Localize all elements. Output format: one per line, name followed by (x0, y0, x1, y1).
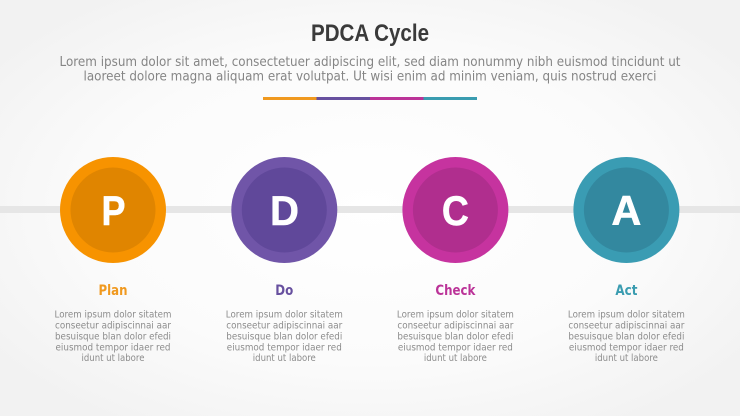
four-colour title underline (263, 97, 477, 100)
heading: Act: Act (615, 283, 638, 299)
text: Act description: eiusmod tempor idaer red (569, 342, 684, 354)
step: Do (226, 157, 343, 364)
intro paragraph: laoreet dolore magna aliquam erat volutpat. Ut wisi enim ad minim veniam, quis nostrud exerci (84, 68, 656, 84)
text: Check description: Lorem ipsum dolor sitatem (397, 310, 514, 320)
text: Plan description: Lorem ipsum dolor sitatem (54, 310, 172, 320)
text: Act description: idunt ut labore (595, 353, 658, 364)
text: Check description: idunt ut labore (424, 353, 487, 364)
text: Check description: besuisque blan dolor efedi (397, 332, 513, 342)
timeline bar (0, 206, 740, 213)
icon: P circle: P (102, 187, 126, 234)
icon: D circle (231, 157, 337, 263)
icon: C circle (402, 157, 508, 263)
text: Check description: conseetur adipiscinnai aar (397, 320, 514, 332)
text: Plan description: idunt ut labore (82, 353, 144, 364)
intro paragraph (60, 54, 680, 84)
step: Plan (54, 157, 172, 364)
heading: Do: Do (275, 283, 294, 299)
text: Check description: eiusmod tempor idaer red (398, 342, 513, 354)
text: Act description: besuisque blan dolor efedi (568, 332, 684, 342)
text: Act description: conseetur adipiscinnai aar (568, 320, 685, 332)
text: Act description (568, 310, 685, 364)
step: Check (397, 157, 514, 364)
title: PDCA Cycle (311, 20, 429, 47)
step: Act (568, 157, 685, 364)
text: Do description (226, 310, 343, 364)
text: Plan description: conseetur adipiscinnai aar (55, 320, 172, 332)
heading: Plan: Plan (98, 283, 128, 299)
icon: C circle: C (442, 187, 469, 234)
icon: A circle: A (611, 187, 641, 234)
text: Plan description: eiusmod tempor idaer red (56, 342, 170, 354)
text: Do description: besuisque blan dolor efedi (226, 332, 342, 342)
heading: Check: Check (435, 283, 476, 299)
text: Check description (397, 310, 514, 364)
text: Act description: Lorem ipsum dolor sitatem (568, 310, 685, 320)
text: Do description: Lorem ipsum dolor sitatem (226, 310, 343, 320)
icon: D circle: D (270, 187, 299, 234)
text: Plan description: besuisque blan dolor efedi (55, 332, 171, 342)
text: Do description: idunt ut labore (253, 353, 316, 364)
text: Plan description (54, 310, 172, 364)
icon: A circle (573, 157, 679, 263)
icon: P circle (60, 157, 166, 263)
text: Do description: eiusmod tempor idaer red (227, 342, 342, 354)
text: Do description: conseetur adipiscinnai aar (226, 320, 343, 332)
